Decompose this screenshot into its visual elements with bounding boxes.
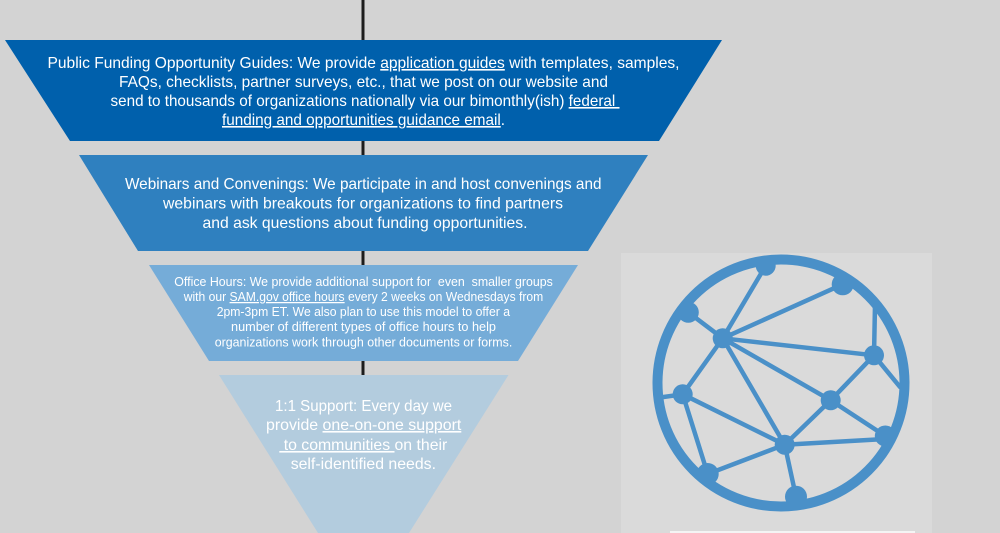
icon: network globe (658, 256, 904, 508)
panel: network globe logo (621, 253, 932, 533)
central vertical line (362, 0, 364, 376)
text: 1:1 support description: 1:1 Support: Every day we (275, 398, 452, 415)
text: 1:1 support description (266, 398, 462, 473)
text: office hours description: number of different types of office hours to help (231, 320, 496, 334)
text: office hours description (174, 275, 553, 350)
text: webinars description: and ask questions about funding opportunities. (202, 215, 528, 232)
text: 1:1 support description: to communities on their (279, 437, 448, 454)
text: guides description: Public Funding Opportunity Guides: We provide application guides with templates, samples, (48, 55, 680, 72)
text: office hours description: organizations work through other documents or forms. (215, 336, 512, 350)
text: 1:1 support description: provide one-on-one support (266, 417, 462, 434)
text: office hours description: Office Hours: We provide additional support for even smaller groups (174, 275, 553, 289)
text: office hours description: 2pm-3pm ET. We also plan to use this model to offer a (217, 305, 510, 319)
text: webinars description (125, 176, 602, 232)
panel: office hours (149, 265, 578, 361)
text: guides description: FAQs, checklists, partner surveys, etc., that we post on our website and (119, 74, 608, 91)
text: 1:1 support description: self-identified needs. (291, 456, 436, 473)
text: webinars description: Webinars and Convenings: We participate in and host convenings and (125, 176, 602, 193)
text: webinars description: webinars with breakouts for organizations to find partners (162, 196, 563, 212)
panel: 1:1 support (219, 375, 508, 533)
text: guides description: funding and opportunities guidance email. (222, 112, 505, 129)
panel: public funding opportunity guides (5, 40, 722, 141)
panel: webinars and convenings (79, 155, 648, 251)
text: office hours description: with our SAM.gov office hours every 2 weeks on Wednesdays from (183, 290, 543, 304)
text: guides description (48, 55, 680, 129)
text: guides description: send to thousands of organizations nationally via our bimonthly(ish) federal (110, 93, 620, 110)
